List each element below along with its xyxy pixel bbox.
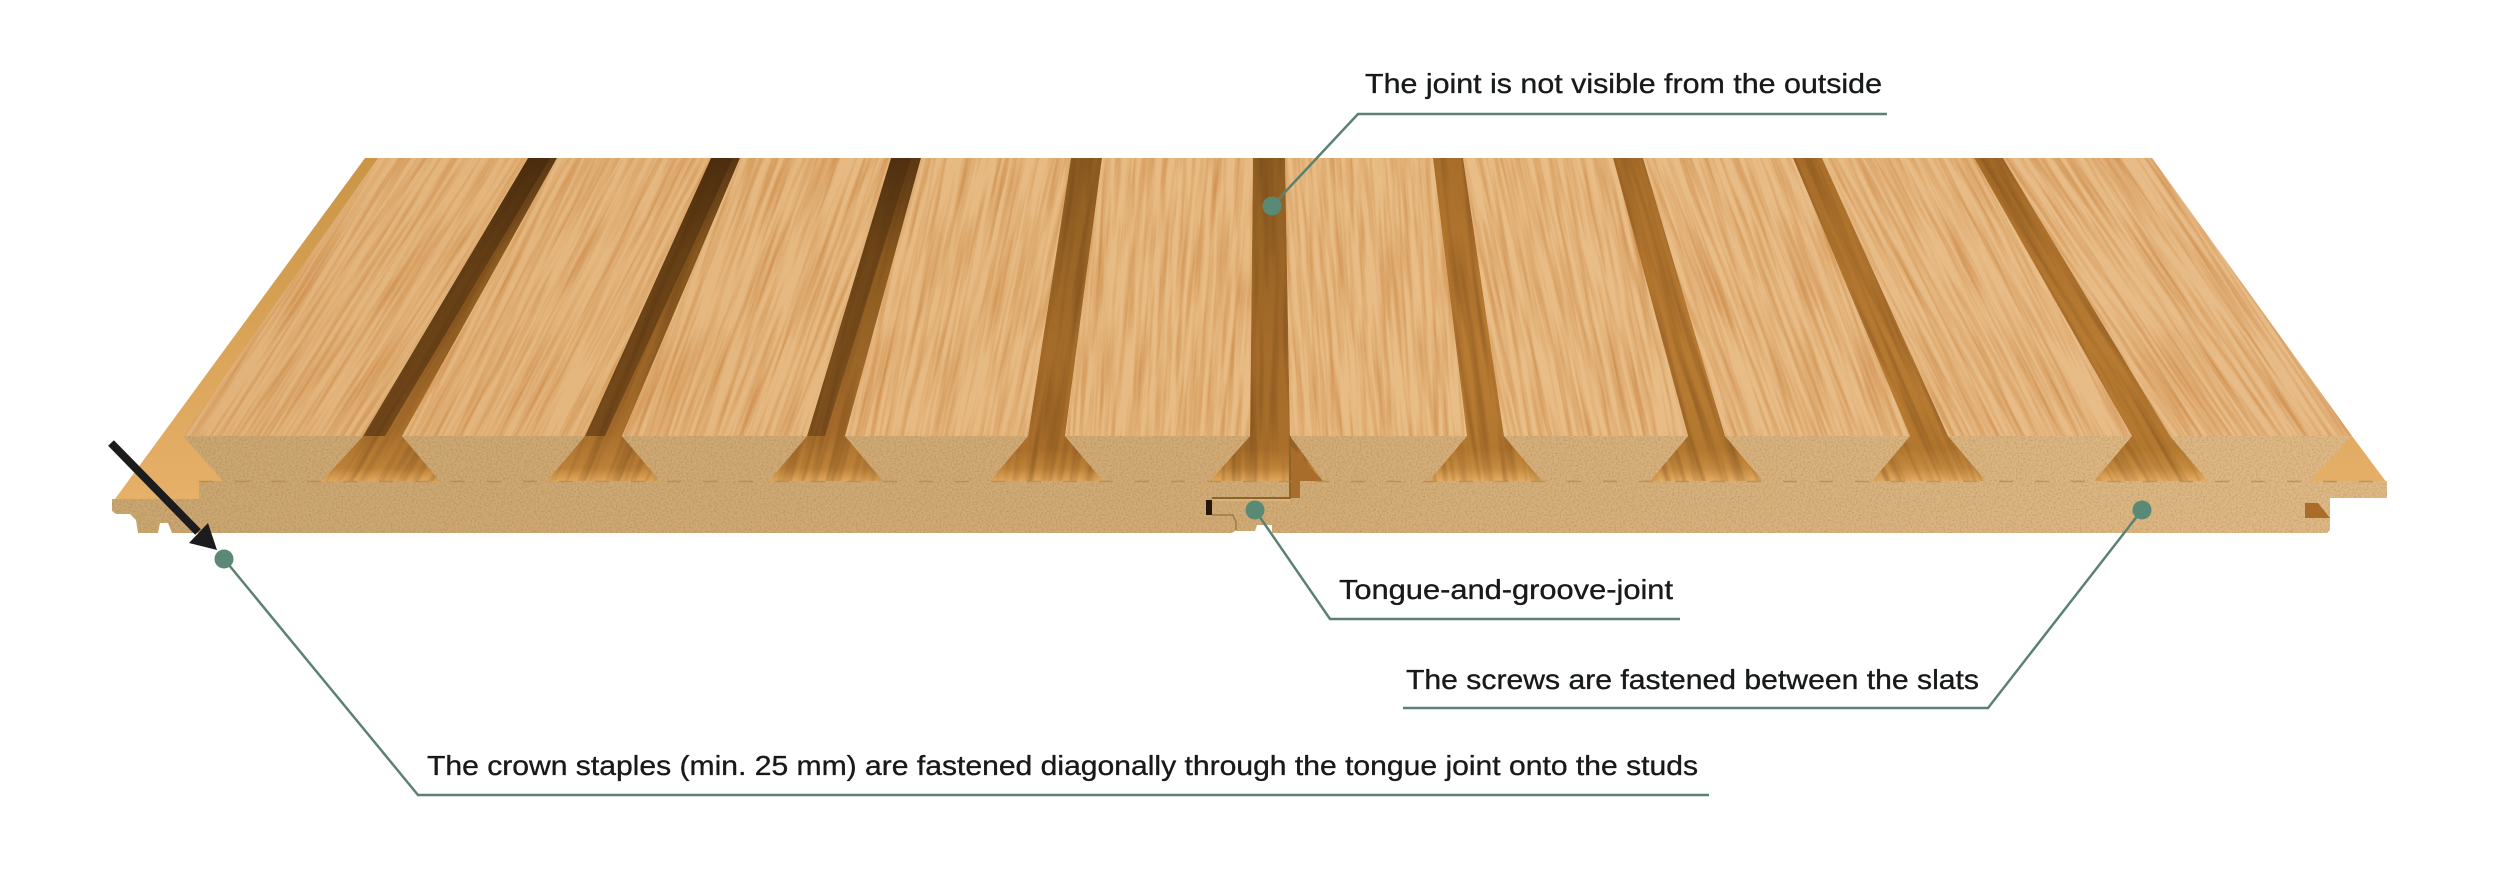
callout: joint not visible — [1262, 68, 1887, 216]
callout: crown staples — [214, 550, 1709, 795]
MDF speckle texture on slat faces — [184, 436, 2350, 481]
callout: tongue-and-groove joint: Tongue-and-groove-joint — [1339, 574, 1673, 605]
right tongue groove notch — [2305, 503, 2330, 518]
arrow: staple direction — [111, 443, 217, 550]
score lines on the board top — [199, 480, 2385, 482]
callout: joint not visible: The joint is not visible from the outside — [1365, 68, 1882, 99]
panel back surface — [115, 158, 2387, 499]
callout: crown staples: The crown staples (min. 25 mm) are fastened diagonally through the tongue joint onto the studs — [427, 750, 1698, 781]
MDF speckle texture on board — [112, 481, 2387, 533]
callout: screws between slats — [1403, 500, 2152, 708]
joint seam detail at the centre — [1206, 436, 1323, 530]
panel: slatted wood wall panel — [0, 158, 2500, 536]
grooves between the slats — [322, 158, 2206, 481]
slat top surfaces with wood grain — [183, 158, 2352, 436]
board base with tongue and groove profile — [112, 481, 2387, 533]
callout: screws between slats: The screws are fastened between the slats — [1406, 664, 1979, 695]
callout: tongue-and-groove joint — [1246, 500, 1680, 619]
slat front cut faces — [183, 436, 2352, 481]
